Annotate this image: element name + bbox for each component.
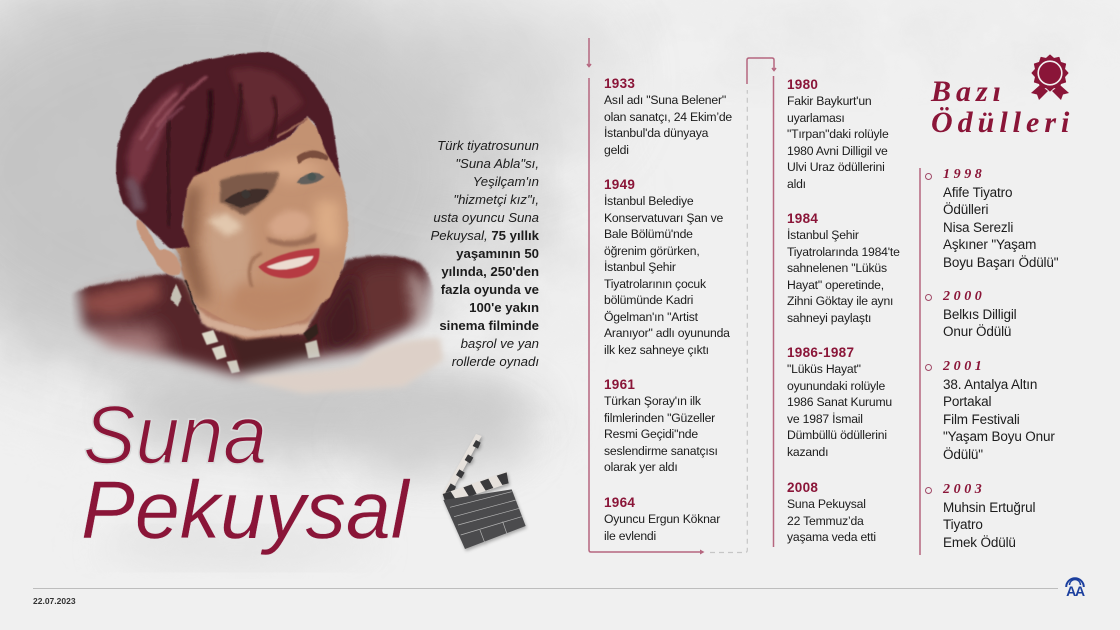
award 2000: Onur Ödülü [943,324,1011,339]
icon: film clapperboard [442,434,528,552]
award 2001: Film Festivali [943,412,1020,426]
award 2000: Belkıs Dilligil [943,306,1017,322]
sweater [71,255,434,393]
entry 1980: uyarlaması [787,111,845,125]
entry 2008: 2008 [787,480,818,495]
entry 1984: Tiyatrolarında 1984'te [787,245,900,259]
face [173,117,348,331]
cream patch at lower right of portrait [243,338,443,393]
award 2000: 2000 [943,289,985,304]
entry 1949 [604,177,730,357]
intro paragraph: yılında, 250'den [441,264,539,279]
entry 1984: 1984 [787,211,818,226]
intro paragraph: 100'e yakın [469,300,539,315]
entry 1961: olarak yer aldı [604,460,678,474]
entry 1980: 1980 Avni Dilligil ve [787,144,888,158]
face shading [180,157,342,323]
entry 1964: ile evlendi [604,529,656,543]
background: watercolor paper [0,0,630,565]
footer rule [33,588,1058,589]
footer date: 22.07.2023 [33,596,76,606]
intro paragraph: başrol ve yan [461,336,539,351]
entry 1986-1987: "Lüküs Hayat" [787,362,861,376]
award 2003: Muhsin Ertuğrul [943,500,1035,514]
award bullet 2001 [925,364,932,371]
entry 1949: Ögelman'ın "Artist [604,310,698,324]
award 2000 [942,289,1017,339]
intro paragraph: rollerde oynadı [452,354,539,369]
entry 1933: 1933 [604,76,635,91]
entry 2008: Suna Pekuysal [787,497,866,511]
entry 1980: Fakir Baykurt'un [787,94,871,108]
award 2001 [942,359,1055,462]
hair [116,52,341,248]
award 2001: 2001 [943,359,985,374]
entry 1980: aldı [787,177,806,191]
entry 1933: İstanbul'da dünyaya [604,126,708,140]
entry 1949: öğrenim görürken, [604,244,700,258]
intro paragraph: Yeşilçam'ın [473,174,539,189]
entry 1980: 1980 [787,77,818,92]
entry 1949: 1949 [604,177,635,192]
entry 1986-1987: 1986-1987 [787,345,854,360]
award bullet 2000 [925,294,932,301]
title: name [81,388,410,556]
award 1998: Nisa Serezli [943,220,1013,234]
timeline column 2 [787,77,900,544]
entry 2008 [787,480,876,544]
portrait: Suna Pekuysal [72,51,444,394]
entry 1984 [787,211,900,325]
entry 1984: sahneyi paylaştı [787,311,871,325]
awards heading: Ödülleri [931,106,1074,139]
award 2003 [942,482,1035,550]
intro paragraph: usta oyuncu Suna [433,210,539,225]
entry 2008: yaşama veda etti [787,530,876,544]
entry 1949: Bale Bölümü'nde [604,227,693,241]
entry 1949: bölümünde Kadri [604,293,693,307]
intro paragraph: Türk tiyatrosunun [437,138,539,153]
nose [268,210,311,238]
award 1998: Ödülleri [943,202,988,217]
brows and eye shadows [220,150,328,215]
entry 1949: İstanbul Şehir [604,260,676,274]
earring [170,283,182,307]
entry 1986-1987: ve 1987 İsmail [787,412,863,426]
entry 1980: Ulvi Uraz ödüllerini [787,160,885,174]
entry 1980 [787,77,889,191]
logo: AA [1065,577,1085,598]
entry 1986-1987: 1986 Sanat Kurumu [787,395,892,409]
entry 1949: Aranıyor" adlı oyununda [604,326,730,340]
entry 1984: Zihni Göktay ile aynı [787,294,893,308]
mouth [258,248,319,278]
timeline column 1 [604,76,732,543]
intro paragraph [430,138,539,369]
entry 2008: 22 Temmuz’da [787,514,864,528]
intro paragraph: "hizmetçi kız"ı, [453,192,539,207]
entry 1949: İstanbul Belediye [604,194,693,208]
entry 1933 [604,76,732,157]
award 1998: Boyu Başarı Ödülü" [943,254,1058,270]
award bullet 1998 [925,173,932,180]
intro paragraph: "Suna Abla"sı, [455,156,539,171]
icon: award rosette [1031,54,1069,100]
award 2001: 38. Antalya Altın [943,376,1037,392]
entry 1933: geldi [604,143,629,157]
awards heading: Bazı [931,75,1006,108]
title: name: Suna [83,388,267,481]
neck [180,267,323,340]
entry 1949: ilk kez sahneye çıktı [604,343,709,357]
entry 1961 [604,377,718,474]
award 1998: 1998 [943,167,985,182]
ear [136,220,181,275]
necklace [202,323,320,373]
entry 1986-1987: kazandı [787,445,828,459]
intro paragraph: sinema filminde [439,318,539,333]
entry 1961: 1961 [604,377,635,392]
entry 1984: İstanbul Şehir [787,228,859,242]
award 2001: Portakal [943,394,991,409]
entry 1986-1987: Dümbüllü ödüllerini [787,428,887,442]
intro paragraph: Pekuysal, 75 yıllık [430,228,539,243]
award 1998: Afife Tiyatro [943,184,1012,200]
award bullet 2003 [925,487,932,494]
award 2003: Tiyatro [943,517,983,532]
title: name: Pekuysal [81,464,409,556]
award 2001: Ödülü" [943,446,983,462]
entry 1980: "Tırpan"daki rolüyle [787,127,889,141]
entry 1984: sahnelenen "Lüküs [787,261,887,275]
entry 1933: Asıl adı "Suna Belener" [604,93,726,107]
entry 1961: Türkan Şoray'ın ilk [604,394,701,408]
entry 1964 [604,495,720,543]
entry 1964: 1964 [604,495,635,510]
entry 1961: Resmi Geçidi"nde [604,427,698,441]
entry 1986-1987: oyunundaki rolüyle [787,379,885,393]
award 2003: Emek Ödülü [943,534,1016,550]
entry 1933: olan sanatçı, 24 Ekim’de [604,110,732,124]
award 2001: "Yaşam Boyu Onur [943,429,1055,444]
entry 1986-1987 [787,345,892,459]
intro paragraph: yaşamının 50 [456,246,539,261]
award 2003: 2003 [943,482,985,497]
entry 1984: Hayat" operetinde, [787,278,884,292]
entry 1961: filmlerinden "Güzeller [604,411,715,425]
entry 1961: seslendirme sanatçısı [604,444,718,458]
entry 1949: Tiyatrolarının çocuk [604,277,706,291]
award 1998: Aşkıner "Yaşam [943,237,1036,252]
awards heading [930,75,1074,139]
award 1998 [943,167,1058,270]
intro paragraph: fazla oyunda ve [441,282,539,297]
entry 1964: Oyuncu Ergun Köknar [604,512,720,526]
entry 1949: Konservatuvarı Şan ve [604,211,723,225]
